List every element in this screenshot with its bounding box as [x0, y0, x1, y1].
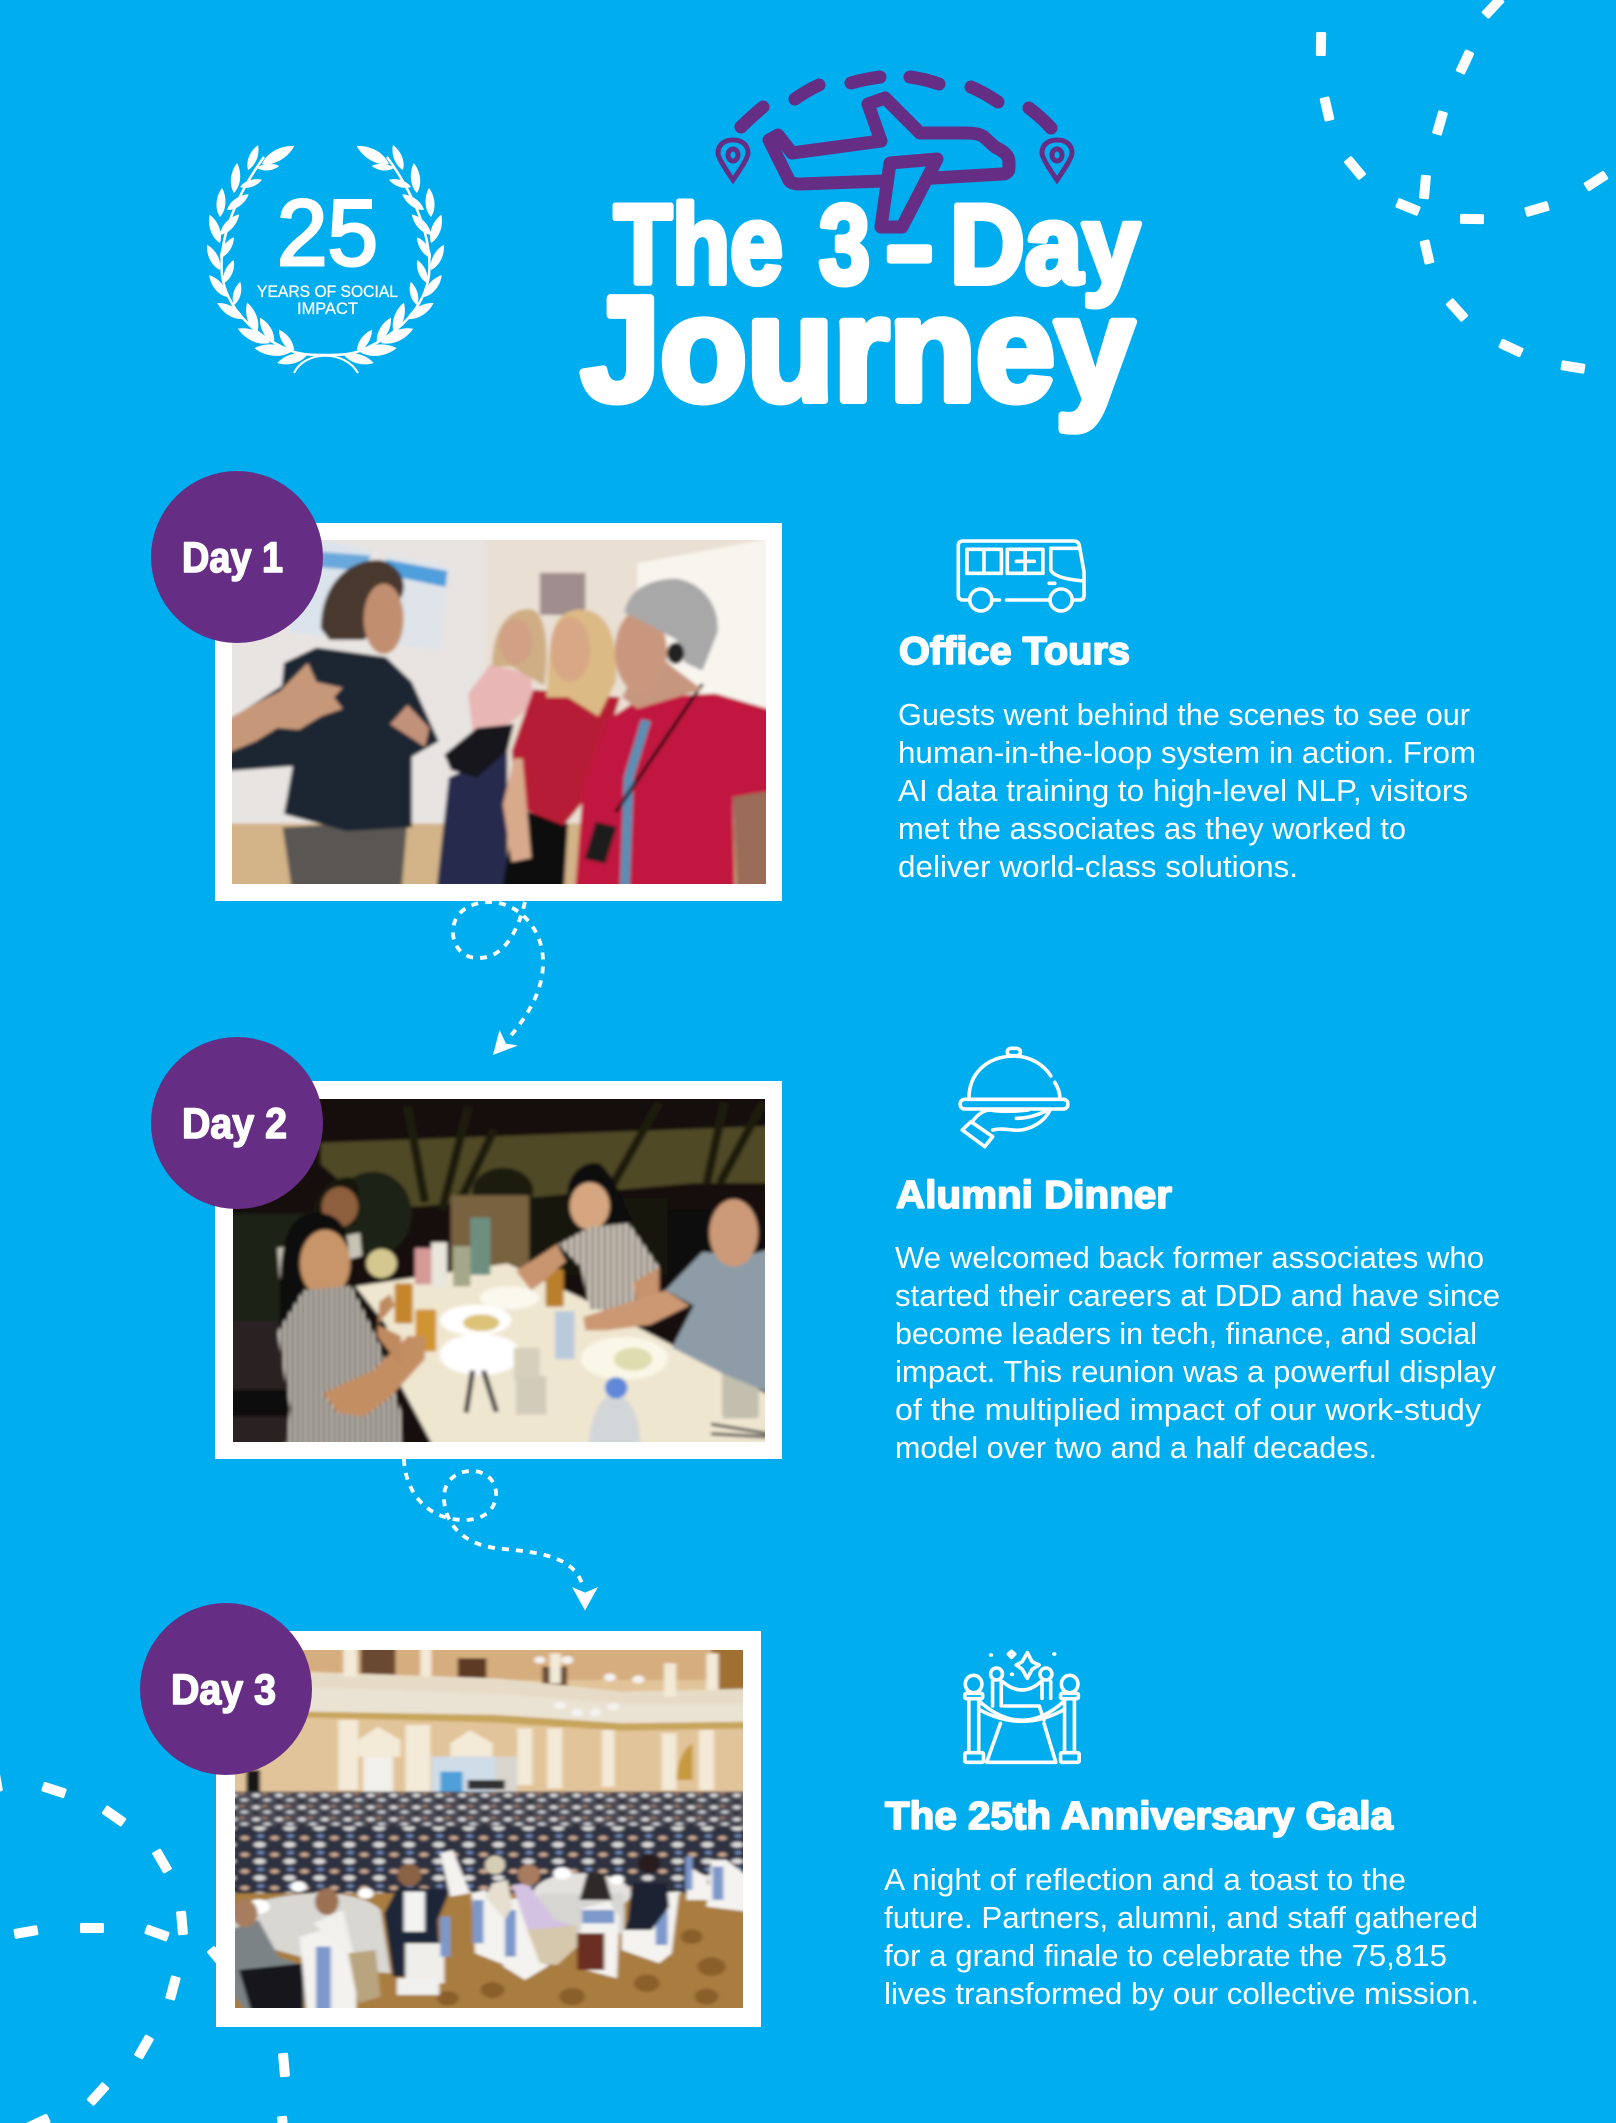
badge: day 1 — [151, 471, 323, 643]
panel: day 3 photo — [216, 1631, 761, 2027]
photo: anniversary gala — [235, 1650, 743, 2008]
plates — [440, 1305, 511, 1335]
badge: day 3 — [140, 1603, 312, 1775]
text: alumni dinner description: impact. This reunion was a powerful display — [895, 1355, 1497, 1389]
panel: day 1 photo — [215, 523, 782, 901]
text: alumni dinner description: We welcomed back former associates who — [895, 1241, 1484, 1275]
woman three — [502, 809, 570, 884]
heading: the 25th anniversary gala: The 25th Anniversary Gala — [885, 1795, 1393, 1838]
title: Day — [950, 182, 1140, 307]
badge caption: YEARS OF SOCIAL — [257, 283, 398, 301]
text: office tours description: AI data training to high-level NLP, visitors — [898, 774, 1468, 808]
text: gala description — [884, 1863, 1479, 2011]
text: alumni dinner description: of the multiplied impact of our work-study — [895, 1393, 1482, 1427]
badge: day 2 — [151, 1037, 323, 1209]
location pin right — [1042, 140, 1072, 180]
title: 3 — [819, 182, 870, 307]
badge number: 25 — [277, 180, 378, 285]
heading: office tours: Office Tours — [899, 630, 1130, 673]
badge: day 2: Day 2 — [182, 1100, 287, 1148]
text: office tours description — [898, 698, 1476, 884]
woman one trousers — [281, 822, 409, 884]
text: office tours description: Guests went behind the scenes to see our — [898, 698, 1470, 732]
back woman — [312, 1177, 359, 1225]
panel: day 2 photo — [215, 1081, 782, 1459]
text: alumni dinner description: become leaders in tech, finance, and social — [895, 1317, 1477, 1351]
text: alumni dinner description — [895, 1241, 1500, 1465]
woman one top — [217, 648, 439, 831]
beer mugs — [395, 1283, 413, 1324]
foreground guests — [235, 1919, 305, 2008]
text: office tours description: met the associates as they worked to — [898, 812, 1406, 846]
woman four — [573, 692, 766, 884]
photo: office tour guests — [232, 540, 766, 884]
glasses and water bottles — [514, 1348, 540, 1380]
table cloth — [356, 1263, 781, 1455]
text: gala description: for a grand finale to celebrate the 75,815 — [884, 1939, 1447, 1973]
plane wing — [881, 159, 937, 227]
text: gala description: lives transformed by our collective mission. — [884, 1977, 1479, 2011]
title: Journey — [581, 267, 1134, 432]
crowd far rows — [219, 1792, 761, 1828]
badge: 25 years of social impact laurel — [203, 141, 448, 373]
text: office tours description: deliver world-class solutions. — [898, 850, 1298, 884]
woman one hand — [219, 663, 343, 757]
text: alumni dinner description: model over two and a half decades. — [895, 1431, 1377, 1465]
woman one hair and face — [321, 560, 404, 640]
photo frame — [215, 523, 782, 901]
table napkins — [248, 1867, 624, 1914]
photo frame — [216, 1631, 761, 2027]
arrow: day 2 to day 3 — [404, 1459, 598, 1610]
title: The — [614, 182, 783, 307]
decorative dashed lines: top right — [1316, 0, 1609, 374]
decorative dashed lines: bottom left — [0, 1767, 290, 2123]
photo: alumni dinner — [233, 1099, 765, 1442]
icon: bus — [958, 541, 1084, 611]
icon: plane with route arc and pins — [718, 77, 1072, 227]
woman centre — [567, 1163, 633, 1229]
text: office tours description: human-in-the-loop system in action. From — [898, 736, 1476, 770]
bottles and glasses on table — [470, 1218, 490, 1275]
woman two — [436, 751, 507, 896]
badge: day 3: Day 3 — [171, 1666, 276, 1714]
laurel wreath — [203, 141, 448, 373]
photo frame — [215, 1081, 782, 1459]
location pin left — [718, 140, 748, 180]
plane body — [769, 98, 1009, 184]
woman left — [280, 1213, 349, 1336]
text: gala description: A night of reflection and a toast to the — [884, 1863, 1406, 1897]
crowd near rows — [219, 1827, 761, 1900]
round tables — [219, 1893, 391, 1973]
icon: cloche and hand — [960, 1048, 1068, 1147]
text: alumni dinner description: started their careers at DDD and have since — [895, 1279, 1500, 1313]
woman right — [663, 1246, 765, 1393]
heading: alumni dinner: Alumni Dinner — [896, 1174, 1172, 1217]
badge: day 1: Day 1 — [182, 534, 283, 582]
carpet — [235, 1891, 743, 2008]
chairs with sashes — [440, 1850, 761, 1980]
text: gala description: future. Partners, alumni, and staff gathered — [884, 1901, 1478, 1935]
route arc dashes — [741, 77, 1051, 128]
arrow: day 1 to day 2 — [453, 902, 543, 1055]
title — [581, 182, 1140, 432]
badge: 25 years of social impact laurel: IMPACT — [297, 300, 358, 318]
icon: red carpet stanchions — [965, 1651, 1079, 1762]
title: - — [885, 182, 934, 307]
